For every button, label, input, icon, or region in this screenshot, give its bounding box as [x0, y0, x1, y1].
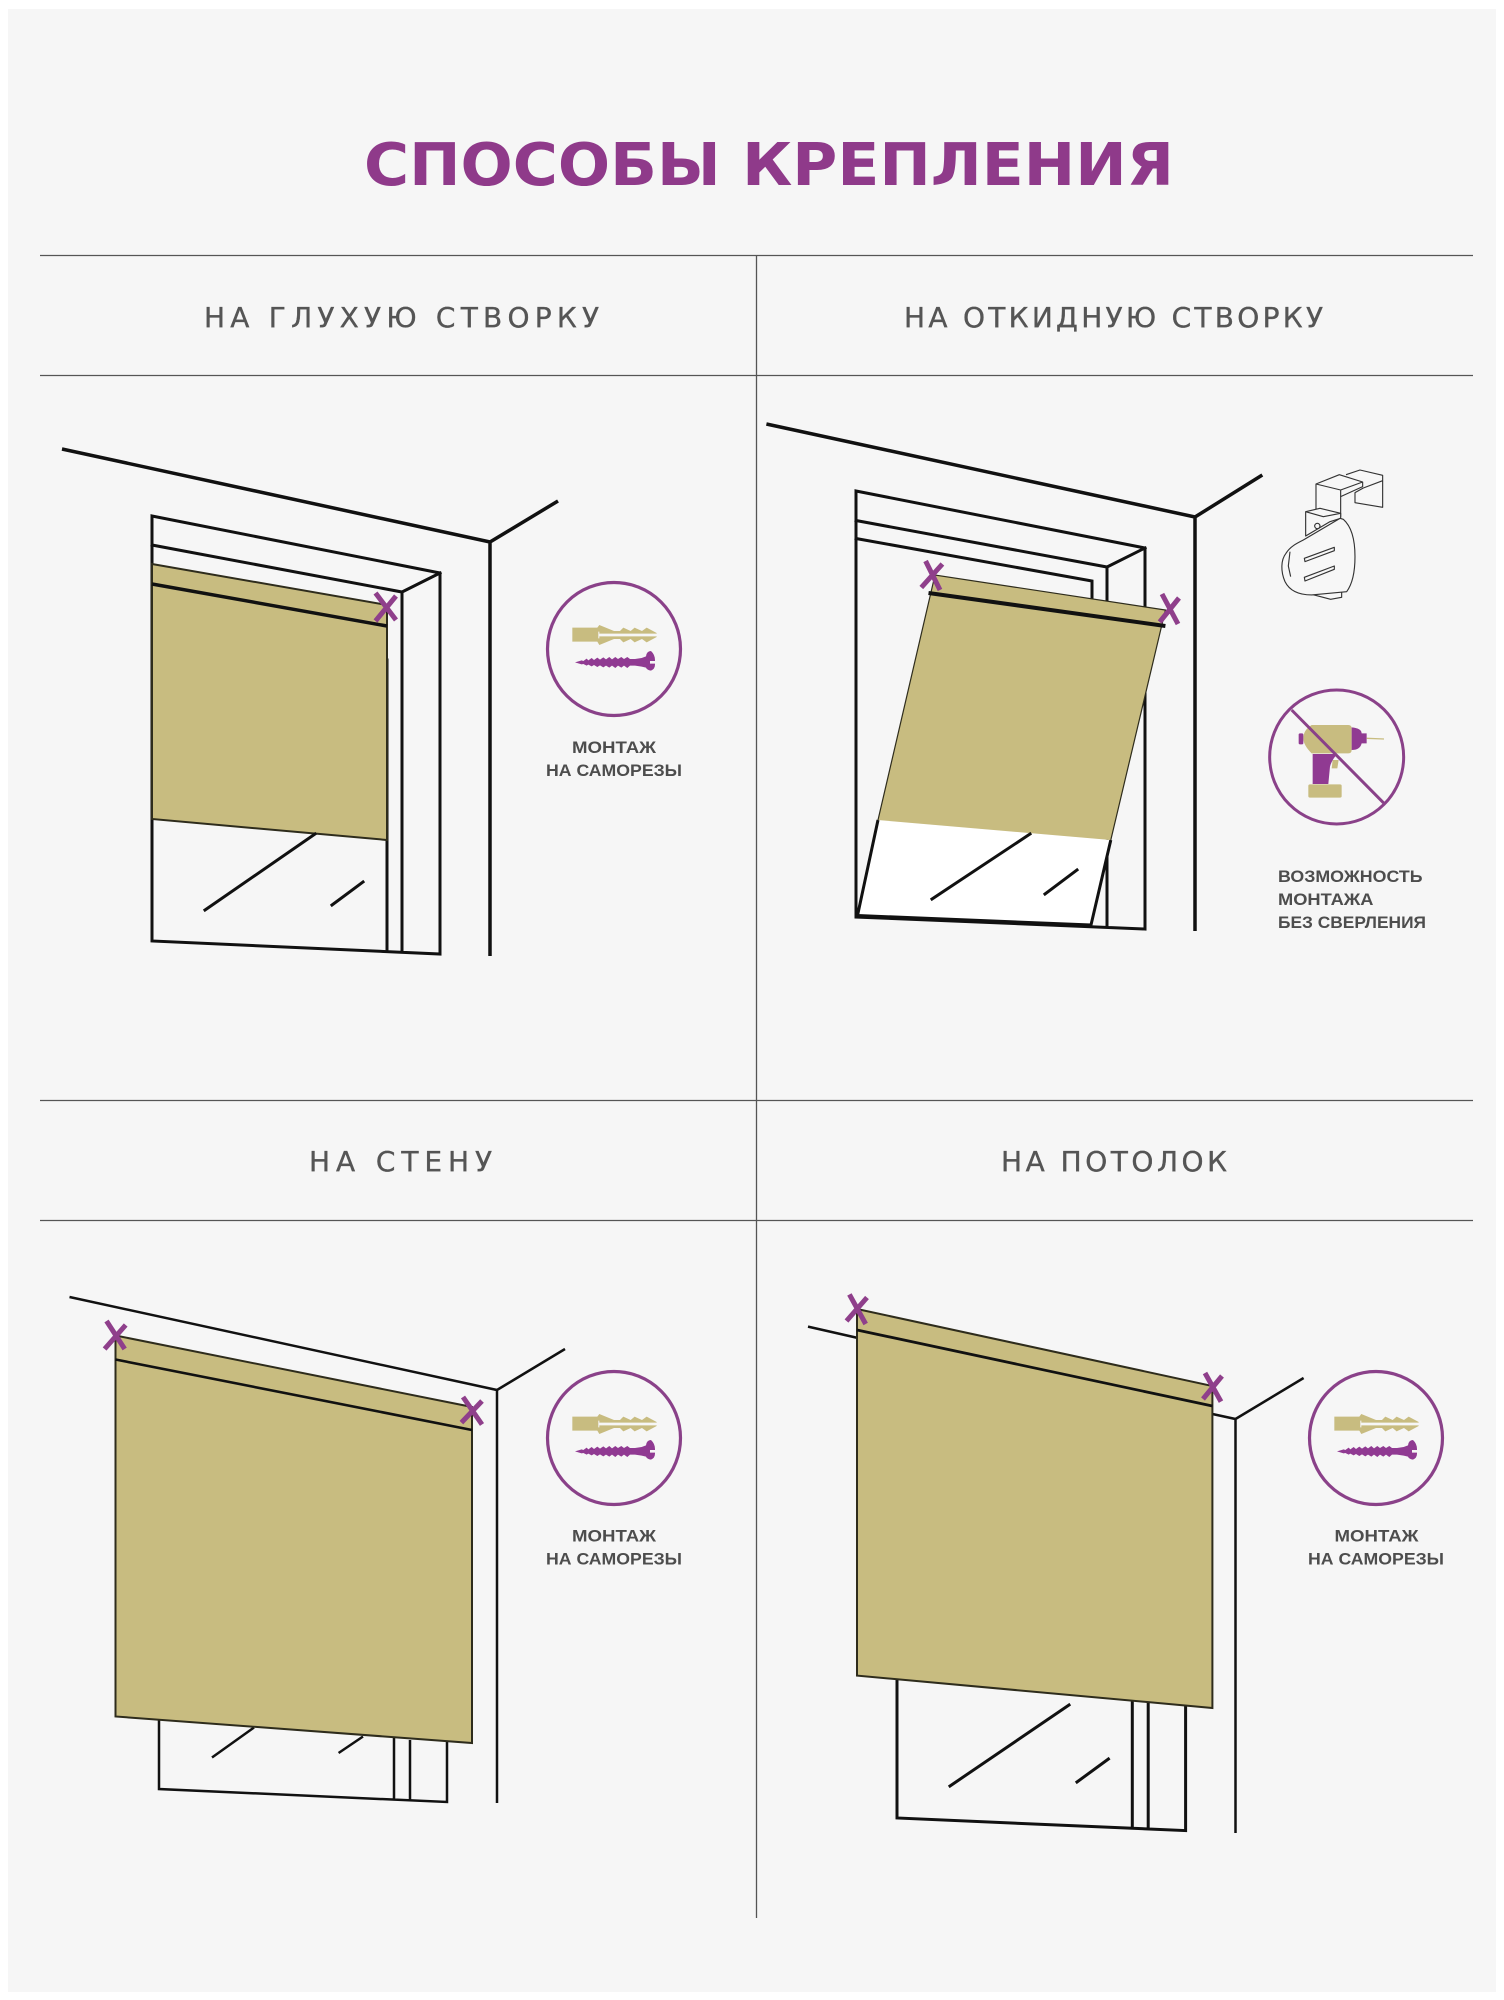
roller blind: [152, 564, 387, 840]
panel: tilt sash mounting: [766, 424, 1262, 931]
wall corner lines: [766, 424, 1262, 931]
icon: screw and dowel: [1310, 1372, 1442, 1504]
open sash: [858, 820, 1111, 925]
blind edges: [878, 575, 1165, 840]
wall corner lines: [70, 1297, 565, 1803]
label: screw mounting: НА САМОРЕЗЫ: [546, 761, 682, 780]
roller blind: [116, 1336, 472, 1743]
label: screw mounting: [546, 1526, 682, 1568]
heading: glass sash: НА ГЛУХУЮ СТВОРКУ: [204, 301, 599, 334]
icon: no drilling: [1270, 690, 1404, 824]
glass highlights: [205, 834, 363, 910]
wall corner lines: [808, 1327, 1304, 1833]
icon: window bracket: [1282, 470, 1383, 599]
label: screw mounting: [546, 738, 682, 780]
label: screw mounting: МОНТАЖ: [572, 738, 657, 757]
label: screw mounting: НА САМОРЕЗЫ: [1308, 1550, 1444, 1568]
label: no-drill mounting: МОНТАЖА: [1278, 890, 1374, 909]
title: СПОСОБЫ КРЕПЛЕНИЯ: [364, 130, 1174, 199]
panel: wall mounting: [70, 1297, 565, 1803]
label: no-drill mounting: БЕЗ СВЕРЛЕНИЯ: [1278, 913, 1426, 932]
glass highlights: [932, 834, 1077, 899]
mounting marks: [921, 561, 1179, 624]
icon: screw and dowel: [548, 1372, 680, 1504]
label: screw mounting: МОНТАЖ: [1334, 1526, 1419, 1546]
window frame: [897, 1680, 1186, 1831]
heading: ceiling: НА ПОТОЛОК: [1001, 1145, 1227, 1178]
roller blind: [857, 1309, 1212, 1708]
window frame: [152, 516, 440, 954]
panel: glass sash mounting: [62, 449, 558, 956]
label: screw mounting: [1308, 1526, 1444, 1568]
mounting marks: [105, 1321, 482, 1424]
mounting marks: [846, 1294, 1222, 1402]
label: screw mounting: МОНТАЖ: [572, 1526, 657, 1546]
window frame: [856, 491, 1145, 929]
blind top bar: [857, 1330, 1212, 1406]
icon: screw and dowel: [548, 582, 680, 716]
glass highlights: [950, 1705, 1108, 1786]
roller blind: [878, 575, 1165, 840]
blind top bar: [152, 584, 387, 626]
sash edges: [858, 820, 1111, 925]
label: no-drill mounting: [1278, 867, 1426, 932]
heading: tilt sash: НА ОТКИДНУЮ СТВОРКУ: [904, 301, 1323, 334]
wall corner lines: [62, 449, 558, 956]
mounting mark: [376, 593, 396, 621]
blind top bar: [116, 1360, 472, 1430]
window frame: [159, 1720, 447, 1802]
blind top bar: [928, 593, 1165, 626]
label: no-drill mounting: ВОЗМОЖНОСТЬ: [1278, 867, 1422, 886]
heading: wall: НА СТЕНУ: [309, 1145, 492, 1178]
label: screw mounting: НА САМОРЕЗЫ: [546, 1550, 682, 1568]
panel: ceiling mounting: [808, 1294, 1304, 1833]
glass highlights: [212, 1728, 363, 1758]
